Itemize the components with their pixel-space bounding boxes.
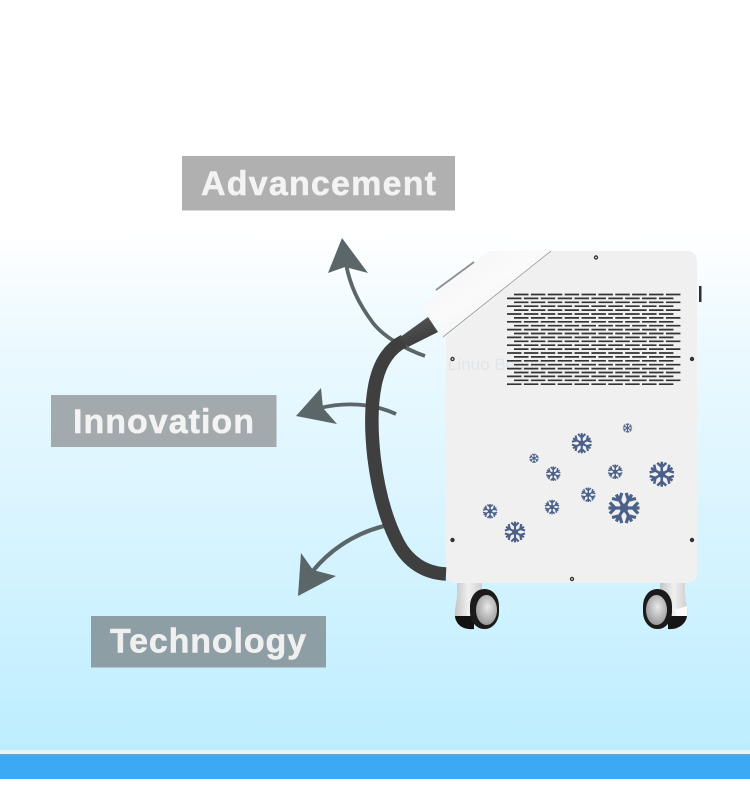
device body panel xyxy=(446,251,697,583)
air vent grille xyxy=(507,294,681,384)
watermark: Linuo Beauty xyxy=(448,355,548,374)
label: Innovation xyxy=(51,395,276,447)
caster wheel: left xyxy=(455,583,499,629)
label: Technology: Technology xyxy=(110,622,306,660)
caster wheel: right xyxy=(643,583,687,629)
holder seam line xyxy=(443,251,551,337)
bottom blue bar xyxy=(0,750,750,779)
label: Advancement: Advancement xyxy=(201,165,436,203)
holder slot xyxy=(436,262,474,290)
arrow: left toward Innovation xyxy=(296,388,396,424)
side button xyxy=(699,286,702,302)
screws xyxy=(450,255,694,581)
arrow: down-left toward Technology xyxy=(298,526,384,596)
snowflakes xyxy=(482,423,675,542)
label: Technology xyxy=(91,616,326,668)
arrow: up-left toward Advancement xyxy=(328,238,425,356)
label: Advancement xyxy=(182,156,455,210)
handpiece holder xyxy=(423,251,551,337)
hose collar xyxy=(399,317,438,347)
cooling hose xyxy=(372,341,446,574)
label: Innovation: Innovation xyxy=(73,403,254,441)
